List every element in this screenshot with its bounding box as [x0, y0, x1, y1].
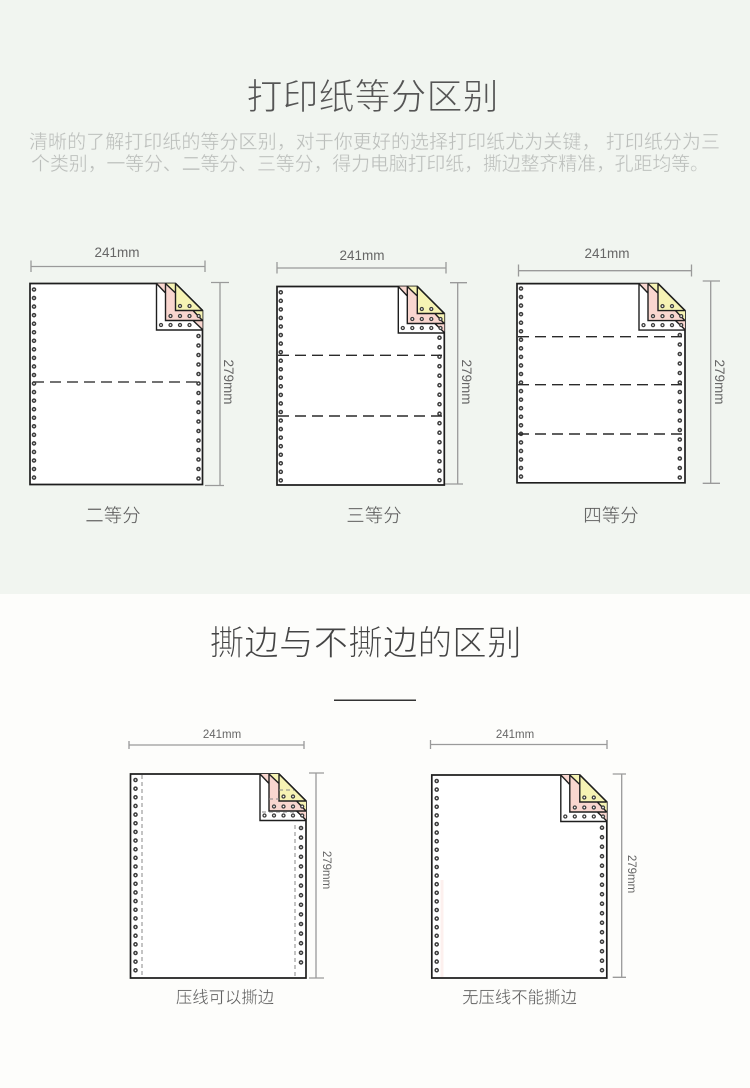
paper sheet: [130, 774, 306, 978]
height dimension: 279mm: [625, 855, 637, 893]
faint pink stripe: [440, 880, 444, 977]
height dimension: [613, 774, 637, 977]
label: not perforated: 无压线不能撕边: [462, 989, 577, 1007]
paper sheet: [277, 286, 444, 485]
panel: top section background: [0, 0, 750, 594]
height dimension: 279mm: [459, 359, 474, 405]
right holes: [196, 336, 201, 479]
label: four-part: 四等分: [583, 505, 639, 526]
width dimension: 241mm: [203, 729, 241, 741]
width dimension: [430, 729, 607, 749]
width dimension: [277, 248, 446, 274]
corner extra hole: [680, 324, 683, 326]
right holes: [677, 335, 682, 478]
label: three-part: 三等分: [346, 505, 402, 526]
left holes: [519, 288, 523, 478]
title: tear-edge difference: 撕边与不撕边的区别: [210, 625, 522, 663]
folded corner: [398, 286, 444, 333]
title underline: [334, 700, 416, 701]
tear line: [33, 381, 198, 383]
diagram: four-part paper: [517, 246, 727, 483]
corner extra hole: [602, 815, 604, 818]
folded corner: [561, 775, 607, 822]
diagram: paper with perforated edge: [129, 729, 332, 978]
height dimension: 279mm: [320, 851, 332, 889]
width dimension: 241mm: [496, 729, 534, 741]
width dimension: 241mm: [94, 245, 140, 260]
diagram: two-part paper: [30, 245, 236, 486]
diagram: paper without perforated edge: [430, 729, 637, 978]
paper sheet: [432, 775, 607, 978]
width dimension: [31, 245, 205, 272]
left holes: [278, 292, 283, 482]
intro text block: 清晰的了解打印纸的等分区别，对于你更好的选择打印纸尤为关键， 打印纸分为三: [29, 131, 720, 153]
tear lines: [518, 337, 684, 434]
height dimension: [309, 773, 332, 978]
right holes: [437, 338, 442, 481]
right holes: [600, 828, 604, 971]
diagram: three-part paper: [277, 248, 474, 485]
paper sheet: [517, 284, 685, 483]
paper sheet: [30, 284, 202, 484]
height dimension: [703, 281, 727, 483]
height dimension: [205, 282, 236, 486]
tear lines: [278, 355, 443, 416]
left holes: [434, 781, 439, 971]
label: perforated: 压线可以撕边: [176, 989, 274, 1007]
folded corner: [260, 774, 306, 820]
width dimension: 241mm: [339, 248, 385, 263]
width dimension: [129, 729, 304, 749]
folded corner: [639, 284, 685, 330]
width dimension: 241mm: [584, 246, 630, 261]
left holes: [32, 290, 36, 479]
corner extra hole: [301, 814, 304, 817]
folded corner: [156, 284, 202, 330]
title: paper division: 打印纸等分区别: [246, 76, 498, 117]
width dimension: [518, 246, 692, 276]
intro text block: [29, 131, 720, 175]
label: two-part: 二等分: [85, 505, 141, 526]
height dimension: [444, 283, 474, 484]
left holes: [133, 780, 138, 971]
height dimension: 279mm: [712, 359, 727, 405]
right holes: [299, 828, 303, 971]
panel: bottom section background: [0, 594, 750, 1088]
intro text block: 个类别，一等分、二等分、三等分，得力电脑打印纸，撕边整齐精准，孔距均等。: [31, 153, 709, 175]
corner extra hole: [439, 326, 442, 330]
height dimension: 279mm: [221, 359, 236, 405]
perforation lines: [142, 775, 295, 977]
